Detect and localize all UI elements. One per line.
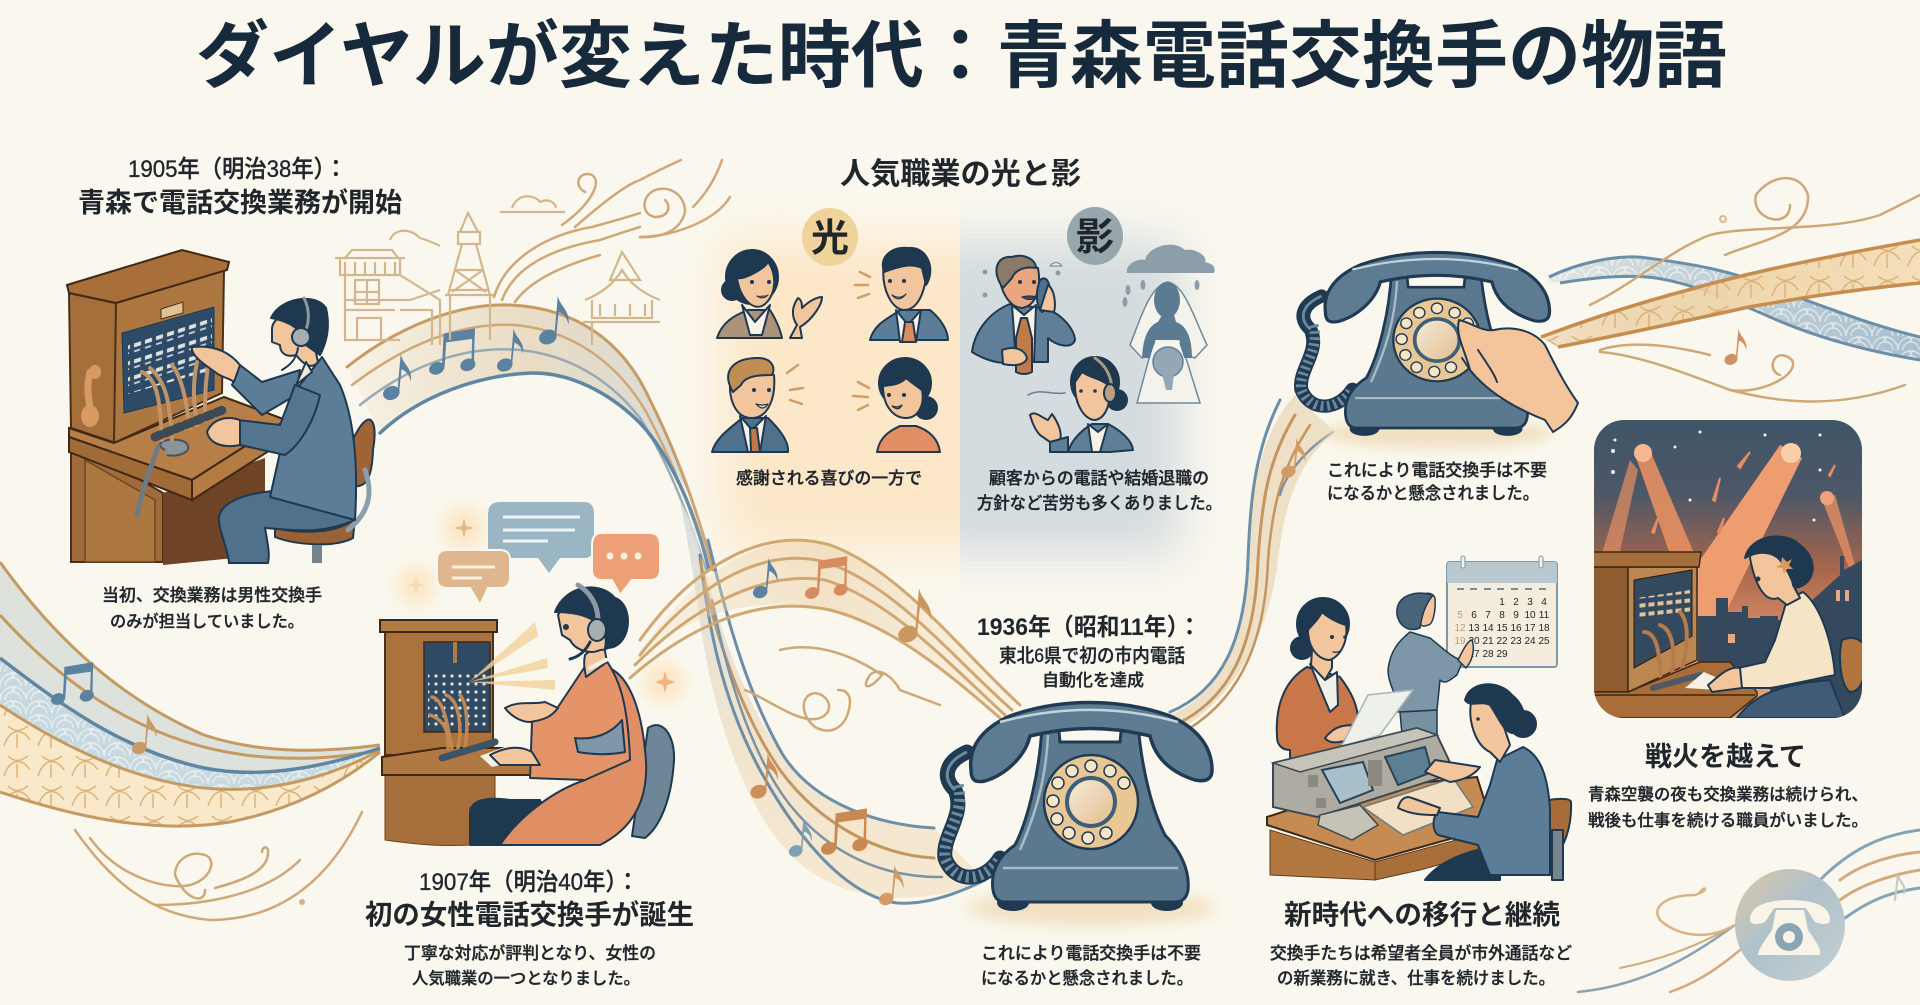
- title: ダイヤルが変えた時代：青森電話交換手の物語: [196, 16, 1727, 97]
- calendar: 24: [1524, 636, 1536, 647]
- calendar: 27: [1468, 649, 1480, 660]
- ribbon: second music arch: [630, 540, 1020, 718]
- switchboard cabinet: [67, 250, 265, 565]
- calendar: 23: [1510, 636, 1522, 647]
- calendar: 18: [1538, 623, 1550, 634]
- text: 1936 heading: 東北6県で初の市内電話: [999, 645, 1185, 667]
- calendar: 2: [1513, 597, 1519, 608]
- hand dialing: [1458, 320, 1578, 432]
- text: upper phone caption: [1327, 461, 1547, 503]
- text: 1905 caption: 当初、交換業務は男性交換手: [102, 586, 322, 605]
- switchboard: [380, 620, 539, 846]
- text: 1907 caption: 人気職業の一つとなりました。: [412, 969, 640, 988]
- ornament: swirl under left ribbon: [75, 812, 362, 920]
- standing woman: [1388, 593, 1473, 735]
- ribbons: upper right decorative: [1541, 178, 1920, 401]
- calendar: 21: [1482, 636, 1494, 647]
- calendar: 25: [1538, 636, 1550, 647]
- calendar: 3: [1527, 597, 1533, 608]
- icon: music notes on second arch: [751, 556, 931, 645]
- calendar: 10: [1524, 610, 1536, 621]
- burning city: [1698, 598, 1778, 667]
- searchlights: [1600, 443, 1862, 640]
- calendar: 29: [1496, 649, 1508, 660]
- ribbon: musical arch from first operator: [347, 296, 713, 570]
- text: 1907 heading: 1907年（明治40年）：: [419, 869, 639, 896]
- ribbon: from lower phone up to upper phone: [1170, 395, 1335, 735]
- icon: note: [1723, 329, 1746, 367]
- calendar: 19: [1454, 636, 1466, 647]
- calendar: 20: [1468, 636, 1480, 647]
- operator man: [192, 298, 375, 563]
- shadow side background: [915, 240, 1180, 555]
- text: shadow caption: 顧客からの電話や結婚退職の: [989, 469, 1209, 488]
- ornament: town skyline: [335, 196, 660, 345]
- meteors: [1652, 452, 1835, 533]
- ornament: swirling lines above town: [494, 160, 730, 302]
- panel: first male operator at switchboard: [67, 250, 375, 565]
- calendar: 13: [1468, 623, 1480, 634]
- text: 1907 caption: 丁寧な対応が評判となり、女性の: [404, 943, 656, 963]
- text: shadow caption: 方針など苦労も多くありました。: [977, 494, 1222, 513]
- ornament: lines around round telephone badge: [1578, 830, 1920, 992]
- icon: round telephone badge: [1735, 869, 1845, 981]
- text: 1907 heading: 初の女性電話交換手が誕生: [365, 899, 694, 930]
- panel: light and shadow: [712, 158, 1222, 555]
- ribbon: left flowing ribbon: [0, 562, 380, 826]
- calendar: 11: [1539, 610, 1550, 621]
- telephone: lower: [945, 702, 1216, 925]
- text: 1905 heading: 1905年（明治38年）：: [128, 156, 347, 183]
- text: wartime caption: 青森空襲の夜も交換業務は続けられ、: [1588, 785, 1868, 804]
- woman in orange blazer: [1277, 598, 1358, 760]
- text: 1907 caption: [404, 943, 656, 988]
- map held: [1341, 690, 1413, 747]
- calendar: 8: [1499, 610, 1505, 621]
- panel: wartime operator: [1592, 420, 1866, 720]
- icon: note on rising ribbon: [1279, 438, 1305, 480]
- heading: popular job: 人気職業の光と影: [840, 158, 1081, 191]
- ribbon: descending S curve to lower telephone: [680, 500, 985, 907]
- seated operator: [1398, 684, 1571, 880]
- calendar: 4: [1541, 597, 1547, 608]
- badge: shadow: [1067, 207, 1123, 265]
- desk and console: [1267, 728, 1493, 880]
- icon: music notes on left ribbon: [49, 662, 157, 756]
- ornament: swirl in S curve: [745, 647, 940, 731]
- light side background: [722, 240, 1022, 550]
- calendar: 28: [1482, 649, 1494, 660]
- text: new era caption: の新業務に就き、仕事を続けました。: [1277, 969, 1555, 988]
- person: man speaking: [712, 358, 803, 452]
- text: 1905 heading: 青森で電話交換業務が開始: [78, 187, 402, 218]
- calendar: 22: [1496, 636, 1508, 647]
- light rays: [469, 622, 555, 690]
- calendar: 9: [1513, 610, 1519, 621]
- desk surface: [69, 352, 286, 515]
- text: 1936 caption: になるかと懸念されました。: [981, 969, 1193, 988]
- calendar: 5: [1457, 610, 1463, 621]
- calendar: [1447, 556, 1557, 667]
- text: 1905 caption: のみが担当していました。: [110, 611, 304, 631]
- text: wartime caption: 戦後も仕事を続ける職員がいました。: [1588, 810, 1868, 830]
- text: upper phone caption: になるかと懸念されました。: [1327, 484, 1539, 503]
- icon: speech bubbles: [396, 502, 684, 702]
- telephone: upper with dialing hand: [1301, 252, 1578, 448]
- icon: music notes on S curve: [748, 753, 904, 907]
- calendar: 17: [1524, 623, 1536, 634]
- icon: music notes on arch: [381, 296, 569, 402]
- text: 1905 caption: [102, 586, 322, 631]
- person: man smiling: [855, 248, 948, 342]
- text: new era caption: [1270, 943, 1572, 988]
- kimono woman: [470, 585, 674, 845]
- text: upper phone caption: これにより電話交換手は不要: [1327, 461, 1547, 480]
- text: 1936 heading: [977, 614, 1201, 690]
- text: new era caption: 交換手たちは希望者全員が市外通話など: [1270, 943, 1572, 963]
- person: woman greeting: [717, 250, 822, 338]
- icon: rain cloud: [1122, 245, 1215, 307]
- panel: first female operator at switchboard: [380, 585, 674, 846]
- ornament: swirls: [1590, 178, 1920, 401]
- stars: [1611, 430, 1822, 522]
- text: shadow caption: [977, 469, 1222, 513]
- operator woman: [1708, 536, 1866, 718]
- calendar: 7: [1485, 610, 1491, 621]
- text: 1936 caption: これにより電話交換手は不要: [981, 944, 1201, 963]
- switchboard: [1593, 567, 1628, 692]
- text: wartime caption: [1588, 785, 1868, 830]
- badge: light: 光: [811, 218, 849, 260]
- badge: light: [802, 208, 858, 266]
- calendar: 16: [1510, 623, 1522, 634]
- text: light caption: 感謝される喜びの一方で: [736, 469, 922, 488]
- text: 1936 heading: 1936年（昭和11年）：: [977, 614, 1201, 641]
- text: new era heading: 新時代への移行と継続: [1284, 899, 1561, 930]
- text: 1905 heading: [78, 156, 402, 218]
- person: troubled operator: [1028, 357, 1133, 452]
- person: woman speaking: [853, 358, 940, 452]
- person: stressed man on phone: [972, 256, 1075, 374]
- calendar: 14: [1482, 623, 1494, 634]
- text: 1936 heading: 自動化を達成: [1042, 671, 1144, 690]
- person: bride silhouette: [1130, 282, 1207, 403]
- text: 1907 heading: [365, 869, 694, 930]
- calendar: 12: [1454, 623, 1466, 634]
- calendar: 1: [1499, 597, 1505, 608]
- badge: shadow: 影: [1076, 217, 1114, 259]
- text: 1936 caption: [981, 944, 1201, 988]
- calendar: 6: [1471, 610, 1477, 621]
- calendar: 15: [1496, 623, 1508, 634]
- text: wartime heading: 戦火を越えて: [1645, 742, 1806, 772]
- panel: new era staff: [1267, 556, 1571, 880]
